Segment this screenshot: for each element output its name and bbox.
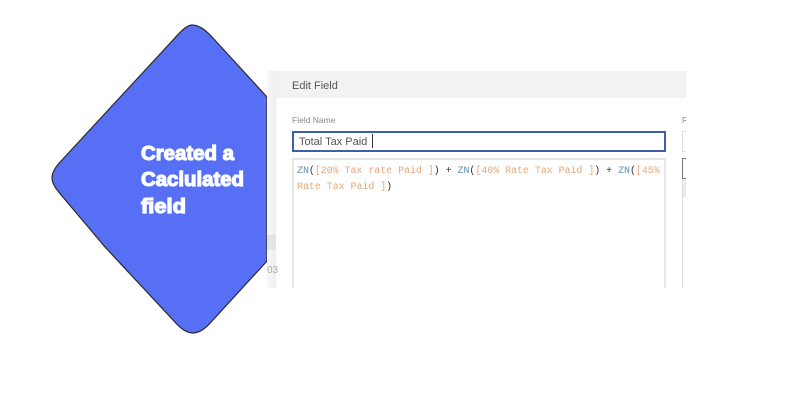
field name input: Total Tax Paid [299,136,367,148]
dialog header: Edit Field [292,80,338,92]
label: Created a Caclulated field: Caclulated [141,169,244,191]
right column input [682,131,692,152]
formula editor [292,158,666,298]
left background strip [267,71,276,288]
screenshot: Edit Field dialog [267,71,686,288]
field name label: Field Name [292,115,335,125]
formula editor: ZN([20% Tax rate Paid ]) + ZN([40% Rate Tax Paid ]) + ZN([45% Rate Tax Paid ]) [297,165,660,192]
label: Created a Caclulated field: Created a [141,143,235,165]
right column list [682,179,692,288]
field name input [292,131,666,152]
dialog header [276,71,686,98]
left background strip: 03 [267,265,278,276]
label: Created a Caclulated field: field [141,196,186,218]
right column search box [682,158,692,179]
